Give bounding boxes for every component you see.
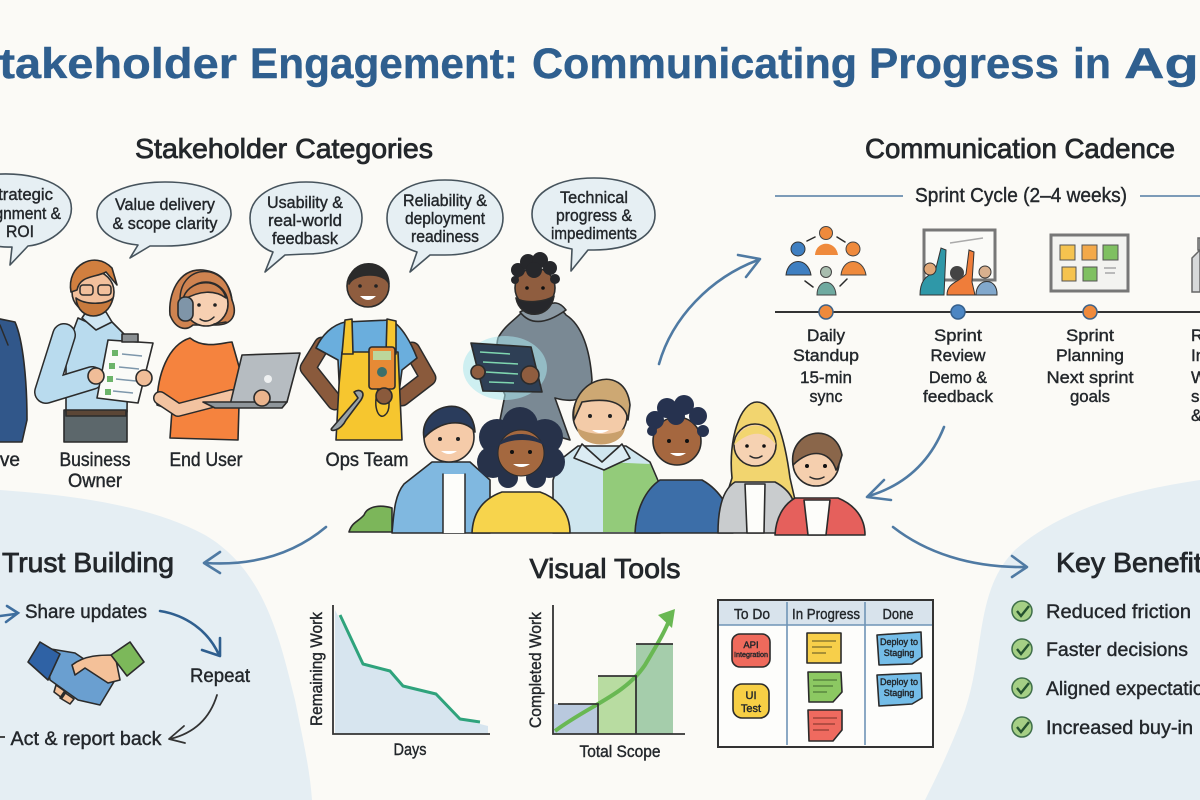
label: sprint review: Sprint xyxy=(934,326,982,345)
person: man in navy xyxy=(635,395,733,533)
speech bubble: end user xyxy=(250,182,362,272)
speech bubble: business owner xyxy=(97,182,231,258)
note: UI test: UI xyxy=(746,690,756,702)
icon: sprint review xyxy=(920,230,997,295)
kanban board: Done xyxy=(882,606,914,623)
icon: daily standup xyxy=(786,226,866,295)
label: act and report back: Act & report back xyxy=(10,729,162,750)
label: end user: End User xyxy=(170,450,243,471)
person: man in blue shirt xyxy=(392,406,490,533)
note: UI test xyxy=(733,684,769,718)
label: business owner: Owner xyxy=(68,471,123,492)
speech bubble: business owner: & scope clarity xyxy=(112,214,218,233)
burnup chart: Total Scope xyxy=(580,742,660,761)
notes: done: Staging xyxy=(884,688,914,698)
speech bubble: ops team xyxy=(387,180,503,272)
icon: sprint planning xyxy=(1051,235,1128,291)
label: sprint planning: goals xyxy=(1070,387,1110,406)
label: sprint planning: Planning xyxy=(1056,346,1124,365)
label: business owner xyxy=(60,450,130,492)
arrow: repeat to report xyxy=(169,695,217,743)
burndown chart: Remaining Work xyxy=(307,612,326,726)
background blob: key benefits xyxy=(925,480,1200,800)
sprint cycle label: Sprint Cycle (2–4 weeks) xyxy=(915,185,1127,207)
title: Communicating xyxy=(532,40,857,88)
arrow: team to benefits xyxy=(893,527,1027,577)
note: API integration: Integration xyxy=(734,650,768,659)
label: daily standup: Standup xyxy=(793,346,859,365)
bush xyxy=(349,506,392,532)
icon: handshake xyxy=(28,642,144,705)
label: sprint review xyxy=(923,326,994,406)
title: in xyxy=(1073,40,1111,88)
person: woman in yellow xyxy=(472,407,570,533)
burndown chart xyxy=(307,605,490,759)
notes: done: Deploy to xyxy=(880,677,918,687)
speech bubble: ops team: readiness xyxy=(411,227,479,246)
label: daily standup xyxy=(793,326,859,406)
benefits checklist xyxy=(1012,601,1200,739)
speech bubble: business owner: Value delivery xyxy=(115,195,215,214)
label: sprint planning: Sprint xyxy=(1066,326,1114,345)
person: blonde woman xyxy=(718,402,797,533)
heading: visual tools: Visual Tools xyxy=(530,553,680,584)
person: tall man centre xyxy=(553,379,662,533)
speech bubble: developer xyxy=(532,178,655,271)
heading: stakeholder categories: Stakeholder Categories xyxy=(135,133,433,164)
heading: trust building: Trust Building xyxy=(2,547,174,578)
speech bubble: ops team: deployment xyxy=(405,209,485,228)
person: ops team xyxy=(308,264,428,440)
notes: done: Staging xyxy=(884,648,914,658)
speech bubble: end user: real-world xyxy=(268,211,342,230)
arrow: team to trust xyxy=(204,527,326,573)
burnup chart xyxy=(526,605,685,761)
benefit: reduced friction: Reduced friction xyxy=(1046,602,1191,623)
kanban board xyxy=(718,600,933,747)
trust cycle xyxy=(0,602,251,750)
notes: done: Deploy to xyxy=(880,637,918,647)
speech bubble: end user: Usability & xyxy=(267,193,344,212)
kanban board: To Do xyxy=(734,606,770,623)
timeline xyxy=(775,305,1200,319)
person: man in red blazer xyxy=(775,433,865,535)
label: sprint review: Demo & xyxy=(929,368,988,387)
speech bubble: developer: Technical xyxy=(560,188,628,207)
note: API integration xyxy=(732,634,770,667)
person: developer with tablet xyxy=(463,252,592,440)
speech bubble: ops team: Reliability & xyxy=(403,191,488,210)
label: repeat: Repeat xyxy=(190,666,251,687)
label: daily standup: 15-min xyxy=(800,368,852,387)
title: Progress xyxy=(869,40,1059,88)
label: sprint planning: Next sprint xyxy=(1046,368,1134,387)
label: sprint review: feedback xyxy=(923,387,994,406)
speech bubble: end user: feedbask xyxy=(272,229,338,248)
person: business owner xyxy=(46,260,153,442)
group of team people xyxy=(392,379,865,535)
label: sprint review: Review xyxy=(930,346,986,365)
arrow: to communication cadence xyxy=(659,255,760,364)
speech bubble: developer: progress & xyxy=(556,206,633,225)
kanban board: In Progress xyxy=(792,606,860,623)
person: executive xyxy=(0,318,27,442)
label: share updates: Share updates xyxy=(25,602,147,623)
label: daily standup: sync xyxy=(810,387,843,406)
speech bubble: executive: ROI xyxy=(6,222,34,241)
label: daily standup: Daily xyxy=(807,326,845,345)
title xyxy=(0,40,1200,88)
burndown chart: Days xyxy=(394,740,426,759)
arrow: updates to repeat xyxy=(160,611,220,656)
benefit: increased buy-in: Increased buy-in xyxy=(1046,718,1193,739)
arrow: cadence to team xyxy=(867,427,944,500)
label: sprint planning xyxy=(1046,326,1134,406)
note: API integration: API xyxy=(743,640,759,651)
title: Engagement: xyxy=(250,40,518,88)
person: end user xyxy=(157,270,300,440)
label: ops team: Ops Team xyxy=(326,450,408,471)
arrow: report onward xyxy=(0,736,5,738)
icon: envelope xyxy=(1192,238,1200,292)
benefit: faster decisions: Faster decisions xyxy=(1046,640,1188,661)
label: business owner: Business xyxy=(60,450,130,471)
heading: communication cadence: Communication Cadence xyxy=(865,133,1175,164)
note: UI test: Test xyxy=(741,703,761,715)
background blob: trust building xyxy=(0,490,312,800)
notes: in progress xyxy=(807,633,842,741)
arrow: into share updates xyxy=(0,606,18,622)
burnup chart: Completed Work xyxy=(526,612,545,728)
notes: done xyxy=(877,632,922,706)
speech bubble: executive xyxy=(0,174,71,265)
label: release notes xyxy=(1191,326,1200,425)
speech bubble: developer: impediments xyxy=(551,224,637,243)
